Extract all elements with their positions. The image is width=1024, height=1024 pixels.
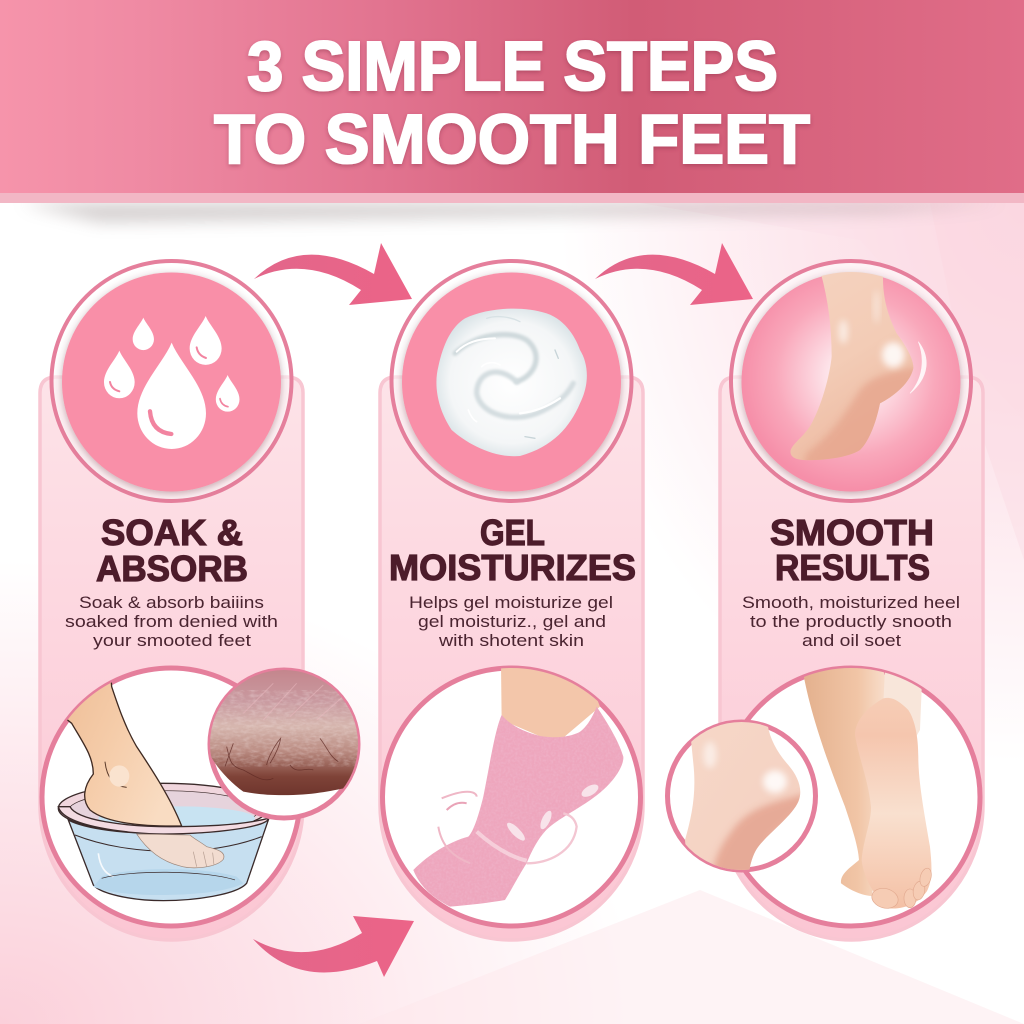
heading: MOISTURIZES: [389, 547, 636, 588]
swirl rings: [438, 792, 577, 863]
heading: [389, 512, 636, 588]
description: Helps gel moisturize gel: [409, 594, 613, 612]
image: gel blob: [436, 309, 587, 456]
image circle: smooth feet: [722, 663, 980, 926]
description: soaked from denied with: [65, 613, 278, 631]
heading: SOAK &: [101, 512, 243, 553]
description: with shotent skin: [438, 632, 584, 650]
image circle: gel sock: [382, 663, 640, 926]
inset circle: smooth heel: [668, 713, 816, 877]
title: [214, 27, 810, 178]
header band: [0, 0, 1024, 203]
toes: [872, 868, 932, 909]
heading: SMOOTH: [770, 512, 934, 553]
description: Soak & absorb baiiins: [79, 594, 264, 612]
description: Smooth, moisturized heel: [742, 594, 960, 612]
panel: soak and absorb: [40, 261, 363, 940]
arrow: lower connector: [253, 916, 414, 977]
heading: GEL: [480, 512, 545, 553]
ankle behind sole: [884, 672, 922, 736]
title: 3 SIMPLE STEPS: [247, 27, 778, 105]
gel pads: [507, 784, 598, 841]
title: TO SMOOTH FEET: [214, 100, 810, 178]
heading: ABSORB: [96, 548, 248, 589]
panel: smooth results: [668, 261, 983, 940]
top circle: gel swirl: [392, 261, 632, 501]
bowl front: [68, 820, 268, 901]
description: [409, 594, 613, 650]
arrow: step 2 to step 3: [595, 243, 753, 305]
back of bowl: [58, 783, 268, 833]
heading: RESULTS: [775, 547, 930, 588]
description: to the productly snooth: [750, 613, 952, 631]
description: your smooted feet: [93, 632, 251, 650]
description: [65, 594, 278, 650]
image: raised heel: [790, 270, 913, 460]
arrow: step 1 to step 2: [254, 243, 412, 305]
rear leg: [804, 668, 885, 896]
sole: [855, 698, 931, 909]
heading: [96, 512, 248, 589]
inset circle: cracked heel: [207, 670, 363, 818]
top circle: heel: [731, 261, 971, 501]
description: [742, 594, 960, 650]
band shadow: [20, 203, 1005, 222]
image circle: foot soaking in bowl: [42, 663, 300, 926]
leg: [67, 682, 182, 826]
panel: gel moisturizes: [380, 261, 643, 940]
description: and oil soet: [802, 632, 901, 650]
description: gel moisturiz., gel and: [418, 613, 606, 631]
icon: water drops: [104, 316, 239, 449]
ankle skin: [501, 668, 600, 738]
top circle: water drops: [52, 261, 292, 501]
heading: [770, 512, 934, 588]
submerged foot: [137, 834, 224, 868]
sock: [413, 707, 623, 907]
